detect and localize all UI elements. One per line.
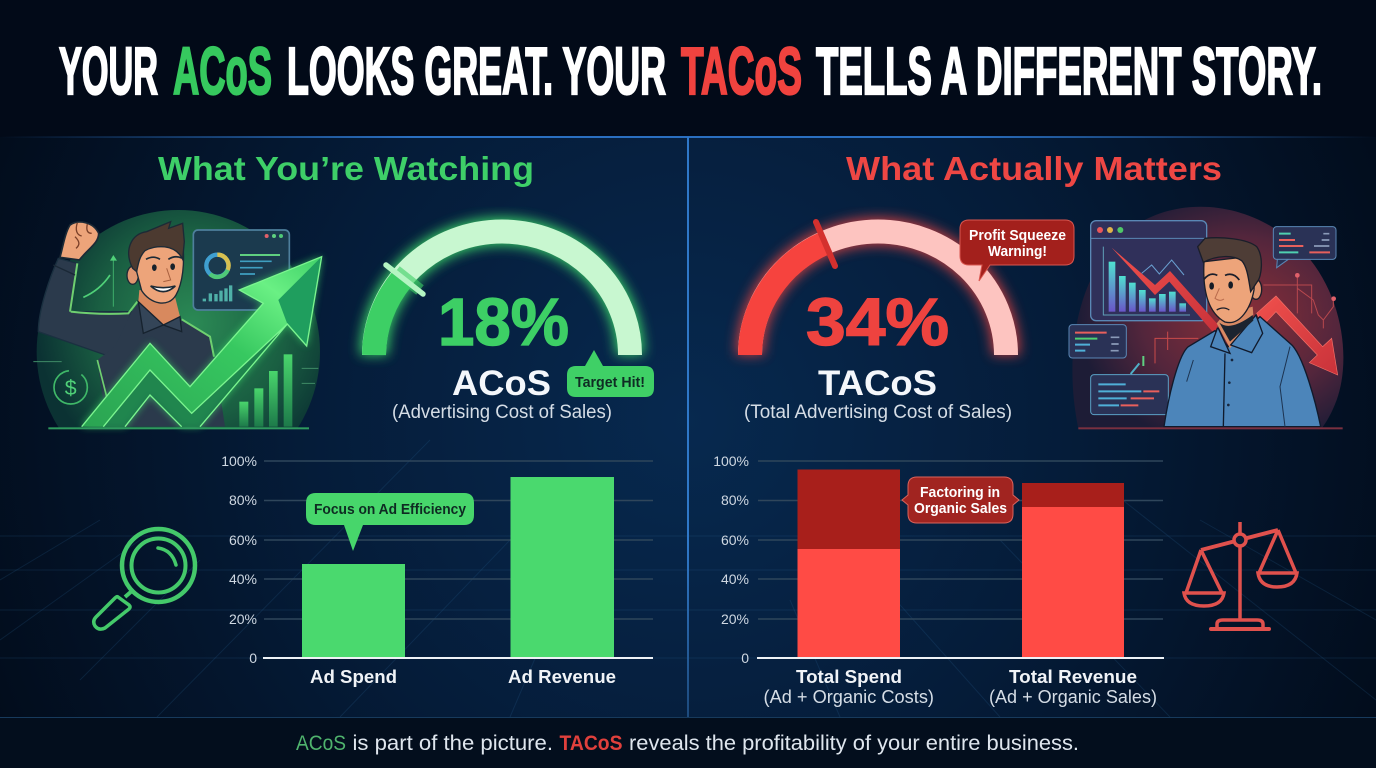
title: ACoS [173, 34, 272, 109]
value: 18%: 18% [438, 285, 569, 360]
axis label: total revenue: (Ad + Organic Sales) [989, 687, 1157, 707]
bar chart: total spend vs total revenue [713, 453, 1164, 707]
callout: factoring in organic sales: Organic Sales [914, 500, 1007, 517]
bar chart: ad spend vs ad revenue: 40% [229, 571, 257, 587]
value: 34%: 34% [806, 285, 949, 360]
illustration: worried man with falling arrow [1069, 207, 1343, 429]
callout: target hit [567, 350, 654, 397]
bar chart: ad spend vs ad revenue [221, 453, 653, 687]
title [59, 34, 1322, 109]
icon: balance scale [1184, 522, 1297, 629]
footer takeaway: is part of the picture. [352, 732, 553, 755]
title: LOOKS GREAT. YOUR [287, 34, 666, 109]
illustration: celebrating man with rising arrow [33, 210, 326, 432]
divider: header line [0, 136, 1376, 138]
axis label: ad spend: Ad Spend [310, 667, 397, 687]
bar chart: ad spend vs ad revenue: 20% [229, 611, 257, 627]
illustration: celebrating man with rising arrow: $ [65, 376, 77, 400]
axis label: total spend: Total Spend [796, 667, 902, 687]
callout: factoring in organic sales: Factoring in [920, 484, 1000, 501]
callout: target hit: Target Hit! [575, 374, 645, 391]
bar chart: ad spend vs ad revenue: 60% [229, 532, 257, 548]
bar chart: total spend vs total revenue: 40% [721, 571, 749, 587]
footer takeaway: TACoS [560, 732, 622, 755]
footer takeaway: ACoS [296, 732, 346, 755]
gauge: TACoS 34% [744, 220, 1074, 423]
callout: profit squeeze warning: Warning! [988, 243, 1047, 260]
bar: total revenue [1022, 483, 1124, 658]
heading: what actually matters: What Actually Matters [846, 150, 1222, 187]
label: TACoS: TACoS [818, 364, 937, 403]
sublabel: total advertising cost of sales: (Total Advertising Cost of Sales) [744, 402, 1012, 423]
axis label: total spend [764, 667, 934, 707]
callout: focus on ad efficiency [306, 493, 474, 551]
bar: total spend [798, 470, 900, 658]
bar chart: total spend vs total revenue: 20% [721, 611, 749, 627]
bar: ad revenue [510, 477, 614, 658]
gauge: ACoS 18% [374, 232, 654, 423]
title: TACoS [681, 34, 802, 109]
bar chart: total spend vs total revenue: 100% [713, 453, 749, 469]
axis label: ad revenue: Ad Revenue [508, 667, 616, 687]
panel: what actually matters [713, 150, 1343, 707]
footer takeaway: reveals the profitability of your entire business. [629, 732, 1079, 755]
title: YOUR [59, 34, 158, 109]
label: ACoS: ACoS [452, 364, 551, 403]
footer takeaway [296, 732, 1079, 755]
bar chart: ad spend vs ad revenue: 80% [229, 492, 257, 508]
bar: ad spend [302, 564, 405, 658]
heading: what you're watching: What You’re Watching [158, 150, 534, 187]
callout: focus on ad efficiency: Focus on Ad Efficiency [314, 501, 467, 518]
axis label: total revenue [989, 667, 1157, 707]
axis label: total revenue: Total Revenue [1009, 667, 1137, 687]
callout: profit squeeze warning: Profit Squeeze [969, 227, 1066, 244]
sublabel: advertising cost of sales: (Advertising Cost of Sales) [392, 402, 612, 423]
panel: what you're watching [33, 150, 654, 687]
bar chart: total spend vs total revenue: 60% [721, 532, 749, 548]
callout: factoring in organic sales [902, 477, 1019, 523]
bar chart: total spend vs total revenue: 0 [741, 650, 749, 666]
axis label: total spend: (Ad + Organic Costs) [764, 687, 934, 707]
callout: profit squeeze warning [960, 220, 1074, 281]
icon: magnifying glass [94, 529, 195, 629]
bar chart: total spend vs total revenue: 80% [721, 492, 749, 508]
bar chart: ad spend vs ad revenue: 0 [249, 650, 257, 666]
divider: center vertical line [687, 137, 689, 717]
bar chart: ad spend vs ad revenue: 100% [221, 453, 257, 469]
